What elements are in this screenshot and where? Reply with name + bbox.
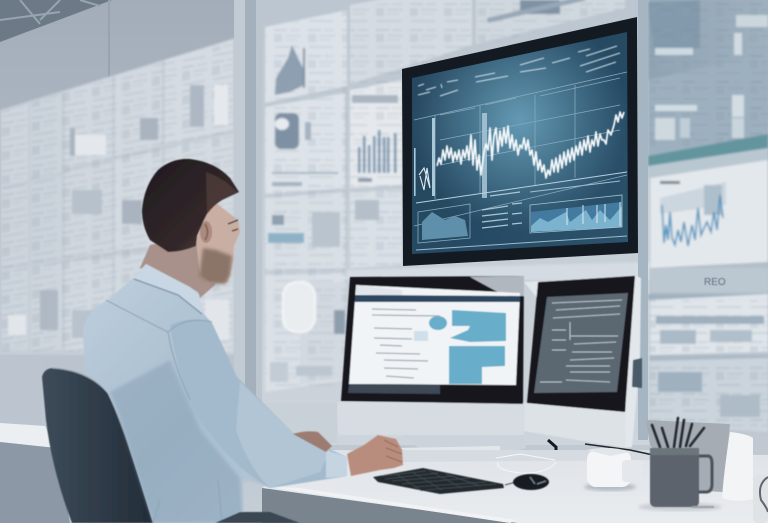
chart: poster circle diagram [283, 282, 315, 332]
chart: poster mountain shape [275, 45, 304, 95]
wall column between wall sections [234, 0, 262, 410]
desk cables [496, 454, 556, 473]
chart: poster rounded shape [275, 113, 299, 149]
area chart: lower left [418, 204, 470, 243]
white bottle [722, 432, 753, 501]
table text: lower centre [482, 192, 522, 228]
ear [200, 221, 212, 243]
desk cable behind cup [585, 444, 653, 455]
small item at far right [753, 475, 768, 523]
monitor screen [349, 285, 520, 385]
right hand [347, 435, 403, 476]
line chart: main time series [437, 112, 624, 178]
main wall monitor [402, 17, 638, 266]
tablet behind mug [646, 420, 730, 492]
desk [262, 450, 768, 523]
text: poster heading: REO [704, 277, 726, 288]
dashboard lower divider [416, 172, 627, 203]
pencils [652, 418, 704, 447]
monitor stand [400, 435, 556, 462]
eye and brow [228, 220, 238, 231]
keyboard [373, 468, 516, 494]
cuff [326, 450, 347, 478]
lower right monitor [524, 276, 642, 448]
beard [199, 248, 232, 284]
panel: far right wall data posters [648, 0, 768, 432]
collar [133, 264, 203, 314]
shirt torso [83, 264, 347, 523]
code text lines [540, 300, 622, 382]
shirt seams [106, 300, 222, 523]
mouse [513, 474, 549, 490]
shirt shadow [110, 360, 242, 523]
dashboard grid lines [414, 72, 627, 226]
face [196, 200, 240, 284]
monitor screen [412, 32, 628, 254]
screen nav bar [355, 295, 520, 302]
shirt sleeve [170, 319, 347, 488]
screen form text [372, 309, 440, 378]
person [83, 159, 403, 523]
mug with pencils [650, 418, 714, 507]
wall base and ledge [0, 355, 337, 523]
screen blue panels [429, 310, 506, 384]
trousers at the desk [215, 512, 300, 523]
chair [42, 368, 155, 523]
panel: centre wall data posters [265, 0, 650, 392]
neck [140, 235, 215, 298]
white cup [584, 448, 642, 491]
chart: poster bar chart [358, 130, 396, 173]
bar area chart: lower right [530, 181, 622, 233]
panel: left wall data posters [0, 38, 236, 355]
dashboard vertical highlight bars [414, 113, 487, 198]
monitor chin [337, 402, 524, 436]
left hand [293, 431, 332, 452]
small loop chart at left [419, 168, 430, 190]
screen taskbar [348, 384, 440, 394]
monitor screen [534, 293, 628, 393]
dashboard header text blocks [418, 46, 620, 96]
lower left monitor [337, 276, 524, 436]
monitor chin [524, 403, 626, 448]
hair [142, 159, 239, 252]
